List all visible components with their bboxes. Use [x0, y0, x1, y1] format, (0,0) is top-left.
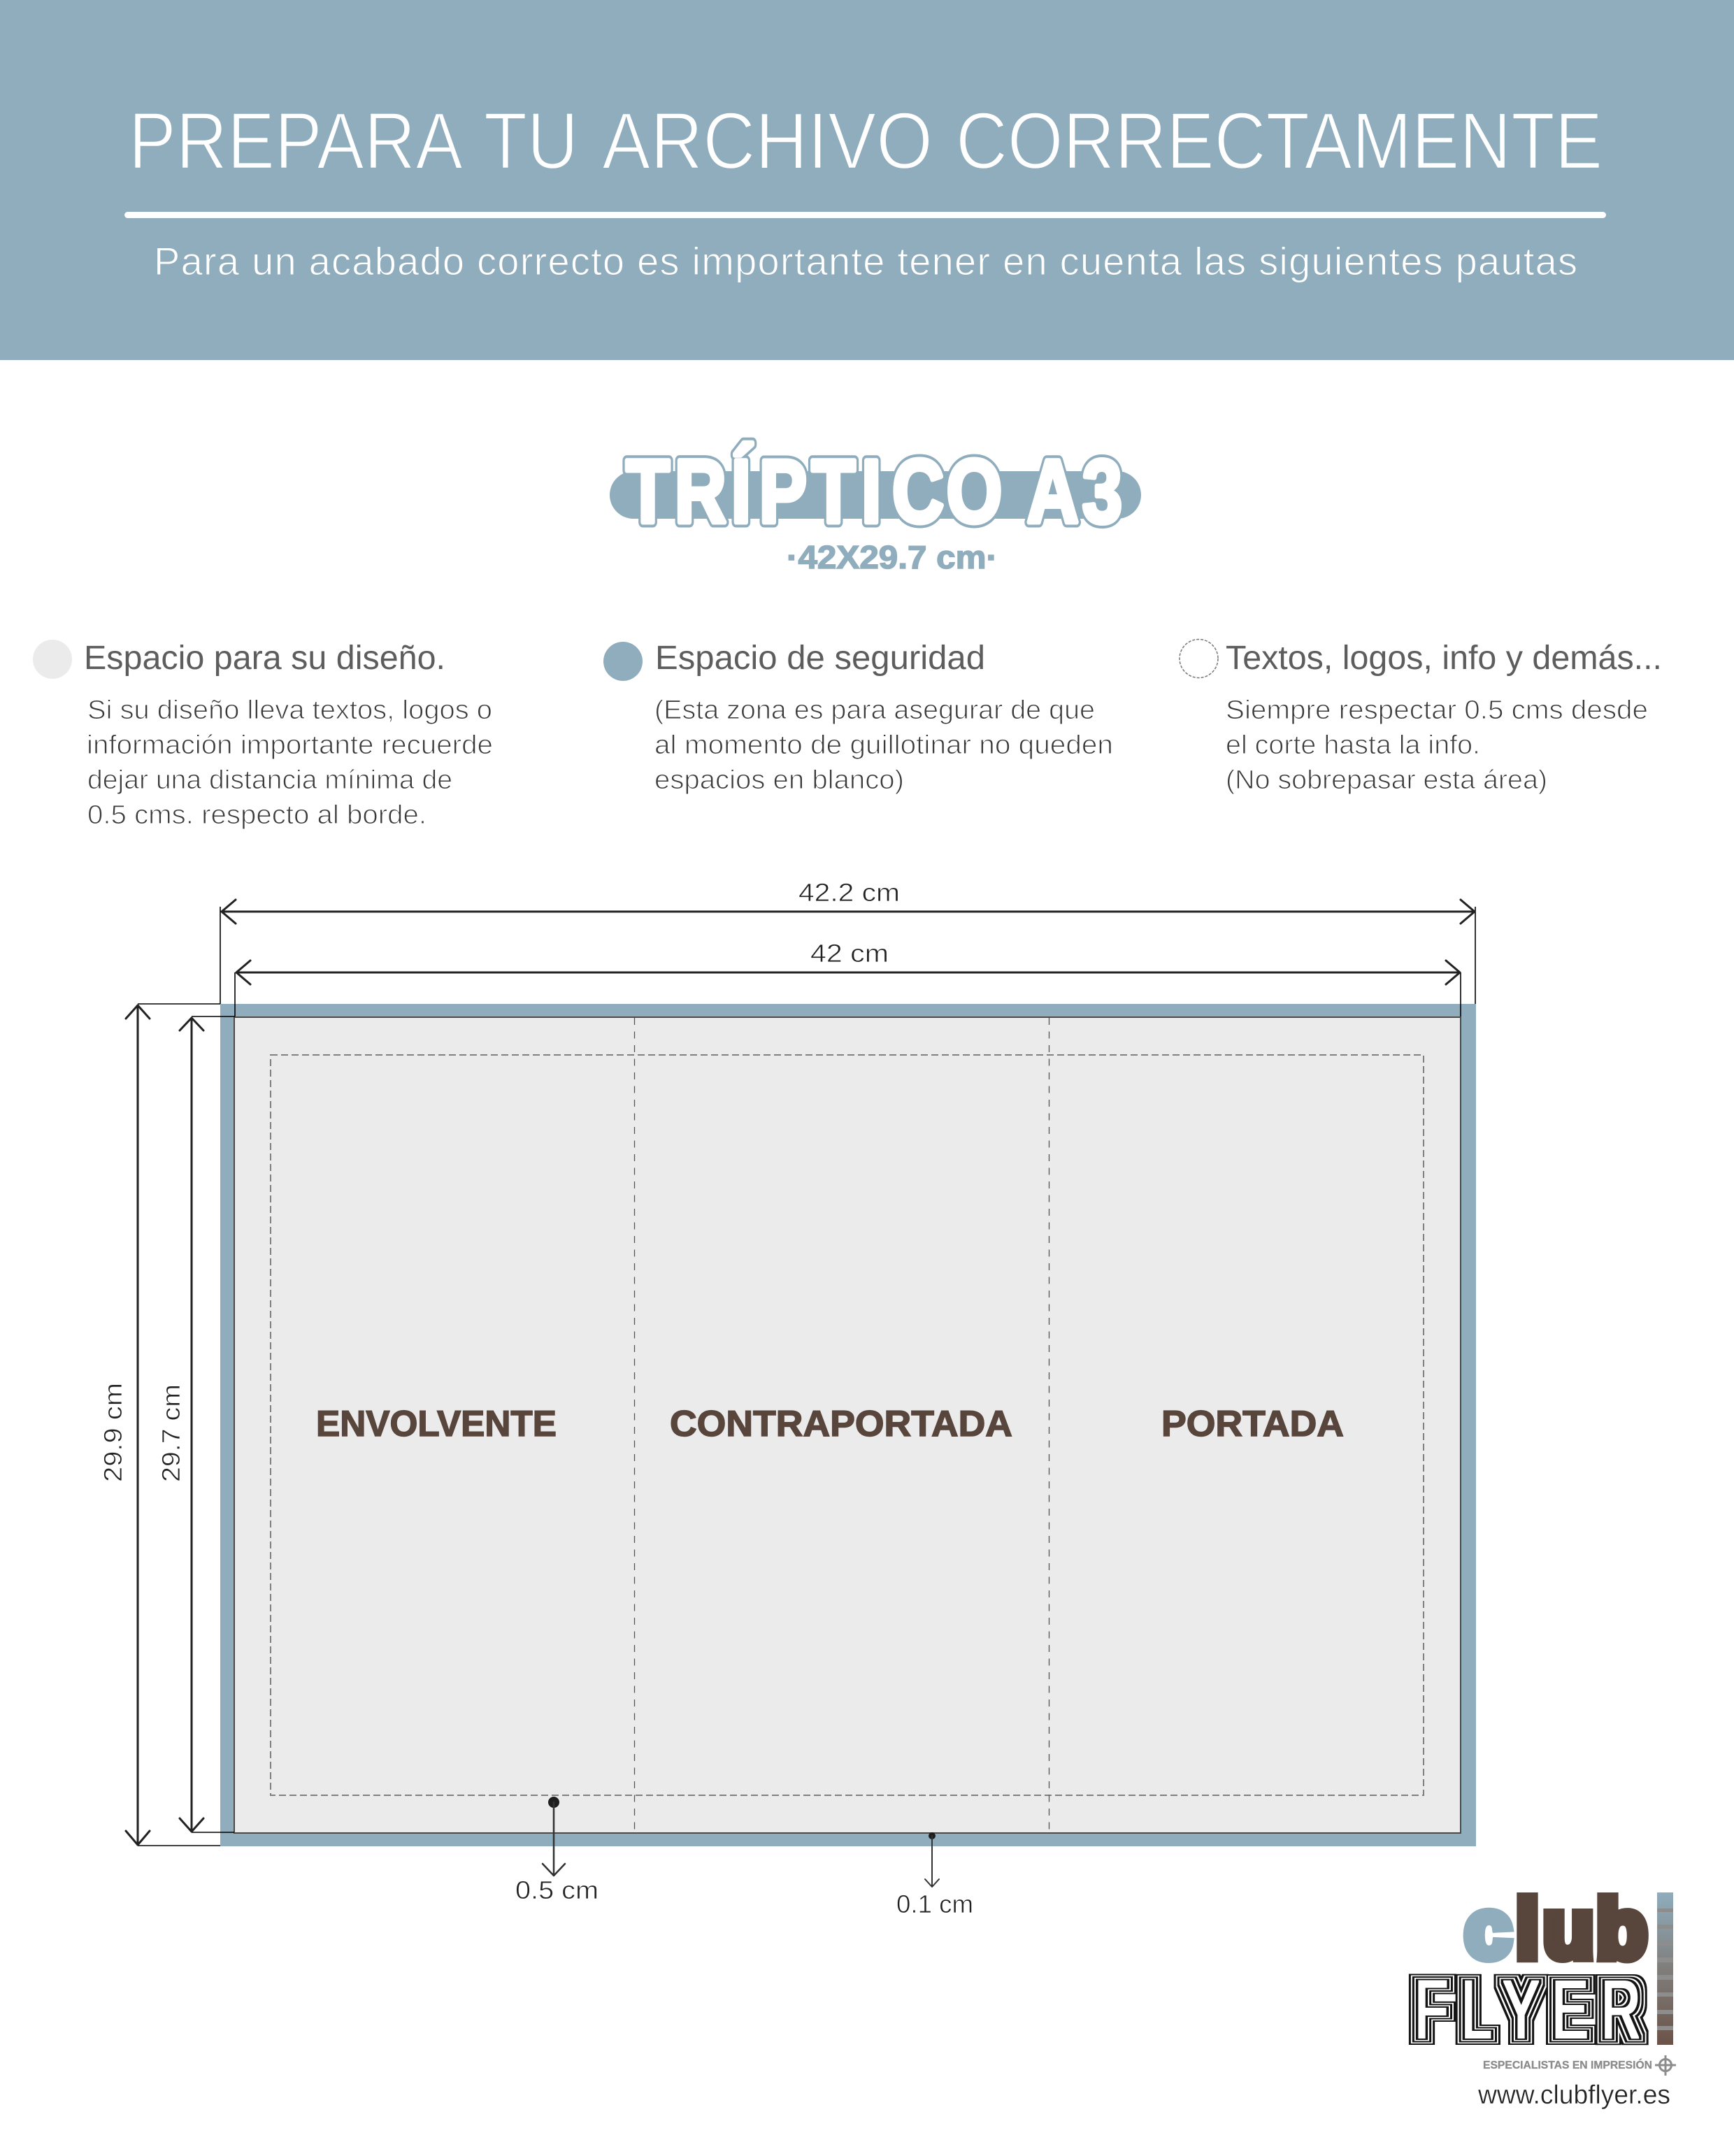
callout: 0.5 cm	[515, 1797, 599, 1904]
fold line right	[1049, 1018, 1050, 1832]
logo word: flyer: FLYER	[1415, 1964, 1640, 2056]
legend body	[87, 696, 493, 830]
title	[129, 96, 1603, 186]
callout: 0.1 cm	[896, 1832, 973, 1918]
legend body	[1226, 696, 1648, 795]
subtitle: Para un acabado correcto es importante tener en cuenta las siguientes pautas	[154, 239, 1577, 283]
legend: espacio de seguridad	[603, 640, 1113, 795]
legend heading: Espacio de seguridad	[655, 640, 985, 677]
dimension: 42.2 cm	[220, 878, 1475, 1004]
bleed area	[220, 1004, 1476, 1846]
dimension: 29.9 cm: 29.9 cm	[99, 1383, 127, 1482]
logo colour bar	[1657, 1892, 1673, 2045]
legend body	[654, 696, 1113, 795]
product title: TRÍPTICO A3	[626, 441, 1122, 542]
icon: crosshair	[1655, 2055, 1676, 2076]
logo: club flyer	[1415, 1883, 1676, 2110]
legend heading: Textos, logos, info y demás...	[1226, 640, 1662, 677]
legend body: información importante recuerde	[87, 731, 493, 760]
legend body: dejar una distancia mínima de	[87, 766, 452, 795]
panel labels: PORTADA	[1161, 1404, 1344, 1444]
legend: espacio para su diseño	[33, 640, 493, 830]
legend body: al momento de guillotinar no queden	[654, 731, 1113, 760]
logo word: club: l	[1516, 1883, 1539, 1976]
dimension: 42.2 cm: 42.2 cm	[798, 878, 900, 907]
panel: trim diagram	[220, 1004, 1476, 1846]
legend body: Si su diseño lleva textos, logos o	[87, 696, 492, 725]
legend body: espacios en blanco)	[654, 766, 904, 795]
safety area	[271, 1055, 1424, 1795]
heading: producto	[610, 441, 1141, 575]
icon: dashed circle	[1180, 639, 1218, 678]
title: ARCHIVO	[602, 96, 933, 186]
legend body: 0.5 cms. respecto al borde.	[87, 800, 427, 830]
panel labels: CONTRAPORTADA	[670, 1404, 1012, 1444]
panel labels: ENVOLVENTE	[316, 1404, 557, 1444]
callout: 0.5 cm: 0.5 cm	[515, 1876, 599, 1904]
panel: header banner	[0, 0, 1734, 360]
divider rule	[124, 212, 1606, 218]
fold line left	[633, 1018, 635, 1832]
website: www.clubflyer.es	[1477, 2080, 1670, 2110]
legend: textos, logos, info	[1180, 639, 1662, 795]
legend body: Siempre respectar 0.5 cms desde	[1226, 696, 1648, 725]
dimension: 29.9 cm	[99, 1004, 220, 1846]
legend body: (No sobrepasar esta área)	[1226, 766, 1547, 795]
title: TU	[484, 96, 578, 186]
legend heading: Espacio para su diseño.	[84, 640, 445, 677]
legend body: el corte hasta la info.	[1226, 731, 1480, 760]
product size: ·42X29.7 cm·	[787, 539, 998, 575]
icon: blue circle	[603, 642, 643, 681]
dimension: 29.7 cm: 29.7 cm	[157, 1384, 185, 1482]
title: CORRECTAMENTE	[956, 96, 1603, 186]
logo word: club: u	[1543, 1883, 1594, 1976]
logo word: club: b	[1596, 1883, 1647, 1976]
product title: TRÍPTICO A3	[626, 441, 1122, 542]
panel labels	[316, 1404, 1344, 1444]
logo word: club: c	[1465, 1883, 1511, 1976]
trim area	[234, 1017, 1461, 1833]
pill background	[610, 471, 1141, 519]
legend body: (Esta zona es para asegurar de que	[654, 696, 1095, 725]
dimension: 42 cm	[235, 939, 1461, 1016]
callout: 0.1 cm: 0.1 cm	[896, 1890, 973, 1918]
dimension: 29.7 cm	[157, 1016, 235, 1832]
icon: gray circle	[33, 640, 72, 679]
logo tagline: ESPECIALISTAS EN IMPRESIÓN	[1483, 2058, 1652, 2071]
dimension: 42 cm: 42 cm	[810, 939, 889, 968]
title: PREPARA	[129, 96, 463, 186]
